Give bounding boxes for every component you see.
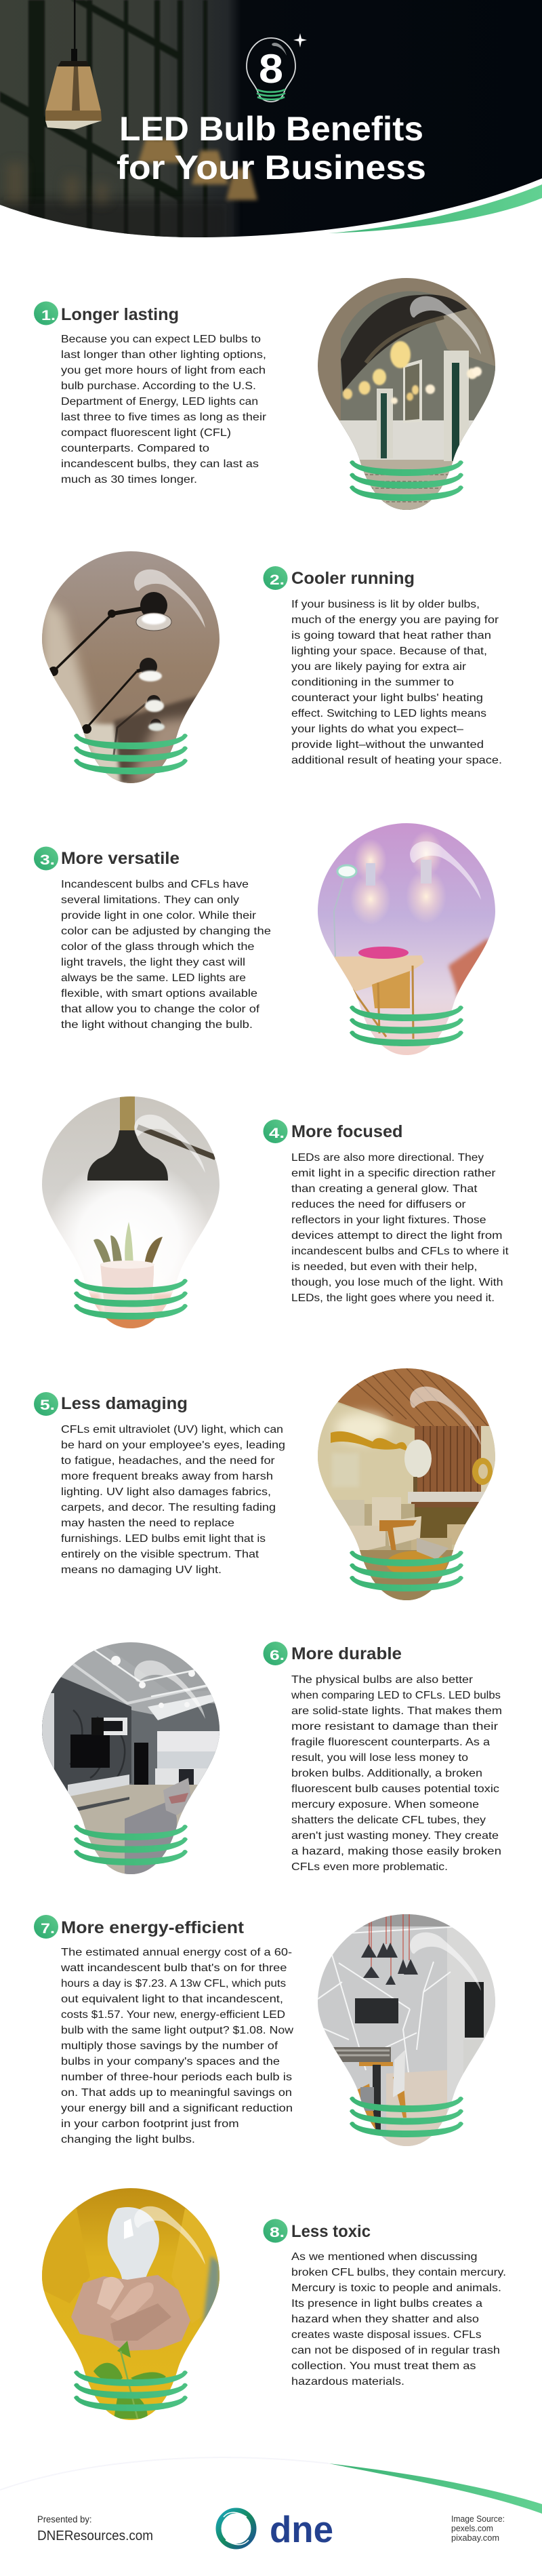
bulb highlight bbox=[410, 296, 481, 355]
body text: in your carbon footprint just from bbox=[61, 2118, 239, 2130]
body text: mercury exposure. When someone bbox=[291, 1799, 479, 1810]
bulb photo: massage room with purple light bbox=[318, 823, 495, 1055]
heading: Cooler running bbox=[291, 569, 415, 588]
header banner bbox=[0, 0, 542, 244]
body text: LEDs, the light goes where you need it. bbox=[291, 1292, 495, 1304]
heading: More energy-efficient bbox=[61, 1918, 245, 1937]
body text: is going toward that heat rather than bbox=[291, 630, 491, 641]
presented by: Presented by: bbox=[37, 2514, 92, 2524]
bulb photo: corridor with globe lights bbox=[318, 278, 495, 514]
body text: counteract your light bulbs' heating bbox=[291, 692, 483, 704]
title: for Your Business bbox=[117, 148, 426, 186]
number badge 8: 8. bbox=[270, 2225, 285, 2240]
body text bbox=[61, 334, 267, 486]
number badge 4 bbox=[263, 1119, 287, 1143]
number badge 1 bbox=[34, 301, 58, 325]
panel: 8 less toxic bbox=[42, 2188, 506, 2420]
title bbox=[117, 110, 426, 186]
presented by bbox=[37, 2514, 153, 2543]
body text: than creating a general glow. That bbox=[291, 1183, 478, 1195]
number badge 7 bbox=[34, 1915, 58, 1939]
image source: Image Source: bbox=[451, 2514, 505, 2524]
icon: numbered light bulb bbox=[247, 33, 307, 102]
body text: hazard when they shatter and also bbox=[291, 2314, 479, 2325]
body text: on. That adds up to meaningful savings on bbox=[61, 2087, 292, 2099]
body text: always be the same. LED lights are bbox=[61, 972, 246, 984]
body text: color of the glass through which the bbox=[61, 941, 255, 953]
body text: much as 30 times longer. bbox=[61, 474, 197, 486]
bulb highlight bbox=[410, 1933, 481, 1991]
body text: CFLs even more problematic. bbox=[291, 1861, 448, 1873]
body text: much of the energy you are paying for bbox=[291, 614, 499, 626]
body text: If your business is lit by older bulbs, bbox=[291, 599, 480, 610]
bulb photo: white room with pendant lights bbox=[318, 1914, 495, 2146]
heading: More focused bbox=[291, 1122, 402, 1141]
body text: though, you lose much of the light. With bbox=[291, 1277, 503, 1288]
body text: conditioning in the summer to bbox=[291, 677, 454, 688]
body text: The physical bulbs are also better bbox=[291, 1674, 474, 1686]
body text: shatters the delicate CFL tubes, they bbox=[291, 1815, 486, 1826]
body text: CFLs emit ultraviolet (UV) light, which can bbox=[61, 1424, 283, 1435]
body text: flexible, with smart options available bbox=[61, 988, 257, 999]
body text: changing the light bulbs. bbox=[61, 2134, 195, 2145]
bulb base rings bbox=[74, 1825, 188, 1865]
body text: that allow you to change the color of bbox=[61, 1004, 260, 1015]
body text: collection. You must treat them as bbox=[291, 2360, 476, 2372]
bulb highlight bbox=[134, 2206, 205, 2265]
green swoosh bbox=[329, 184, 542, 233]
body text: watt incandescent bulb that's on for three bbox=[60, 1962, 287, 1974]
body text: furnishings. LED bulbs emit light that is bbox=[61, 1533, 266, 1545]
bulb base rings bbox=[350, 1006, 463, 1046]
body text: out equivalent light to that incandescent, bbox=[61, 1994, 283, 2005]
body text: more frequent breaks away from harsh bbox=[61, 1471, 273, 1482]
body text: broken bulbs. Additionally, a broken bbox=[291, 1768, 482, 1779]
body text: several limitations. They can only bbox=[61, 894, 239, 906]
bulb base rings bbox=[350, 1551, 463, 1591]
logo: dne: dne bbox=[270, 2508, 333, 2550]
bulb photo: lounge with wood slats bbox=[318, 1368, 498, 1600]
number badge 2 bbox=[263, 566, 287, 590]
body text: fluorescent bulb causes potential toxic bbox=[291, 1783, 499, 1795]
bulb base rings bbox=[74, 1279, 188, 1320]
body text: effect. Switching to LED lights means bbox=[291, 708, 486, 719]
body text: reduces the need for diffusers or bbox=[291, 1199, 466, 1210]
body text bbox=[291, 1152, 509, 1304]
heading: More durable bbox=[291, 1644, 402, 1663]
body text: are solid-state lights. That makes them bbox=[291, 1705, 502, 1717]
body text bbox=[60, 1947, 293, 2145]
bulb photo: hand holding white bulb bbox=[42, 2188, 220, 2420]
bulb highlight bbox=[134, 1115, 205, 1173]
number badge 4: 4. bbox=[269, 1126, 285, 1141]
body text: a hazard, making those easily broken bbox=[291, 1846, 501, 1857]
body text: Mercury is toxic to people and animals. bbox=[291, 2282, 501, 2294]
body text: bulb with the same light output? $1.08. Now bbox=[61, 2025, 293, 2036]
panel: 3 more versatile bbox=[34, 823, 495, 1055]
bulb base rings bbox=[350, 2097, 463, 2137]
body text: is needed, but even with their help, bbox=[291, 1261, 477, 1273]
body text: carpets, and decor. The resulting fading bbox=[61, 1502, 276, 1513]
body text: Because you can expect LED bulbs to bbox=[61, 334, 261, 345]
body text: the light without changing the bulb. bbox=[61, 1019, 253, 1031]
body text: Department of Energy, LED lights can bbox=[61, 396, 258, 408]
heading: Less damaging bbox=[61, 1394, 188, 1413]
bulb base rings bbox=[74, 2371, 188, 2411]
body text: hours a day is $7.23. A 13w CFL, which puts bbox=[61, 1978, 286, 1989]
body text: compact fluorescent light (CFL) bbox=[61, 427, 231, 439]
body text bbox=[291, 599, 502, 766]
panel: 1 longer lasting bbox=[34, 278, 495, 514]
number badge 1: 1. bbox=[41, 308, 56, 323]
body text: costs $1.57. Your new, energy-efficient LED bbox=[61, 2009, 285, 2021]
body text: last longer than other lighting options, bbox=[61, 349, 266, 361]
body text: may hasten the need to replace bbox=[61, 1518, 234, 1529]
body text: broken CFL bulbs, they contain mercury. bbox=[291, 2267, 506, 2278]
body text bbox=[61, 879, 271, 1031]
body text: lighting. UV light also damages fabrics, bbox=[61, 1486, 271, 1498]
body text: number of three-hour periods each bulb is bbox=[61, 2072, 292, 2083]
body text: fragile fluorescent counterparts. As a bbox=[291, 1737, 490, 1748]
body text: Incandescent bulbs and CFLs have bbox=[61, 879, 249, 890]
body text: The estimated annual energy cost of a 60- bbox=[61, 1947, 292, 1958]
body text: last three to five times as long as their bbox=[61, 412, 267, 423]
presented by: DNEResources.com bbox=[37, 2529, 153, 2543]
body text: Its presence in light bulbs creates a bbox=[291, 2298, 482, 2310]
number badge 6: 6. bbox=[270, 1648, 285, 1663]
body text: bulbs in your company's spaces and the bbox=[61, 2056, 280, 2067]
body text: to fatigue, headaches, and the need for bbox=[61, 1455, 275, 1467]
body text: your energy bill and a significant reduction bbox=[61, 2103, 293, 2114]
bulb highlight bbox=[410, 841, 481, 900]
body text: you are likely paying for extra air bbox=[291, 661, 467, 673]
number badge 2: 2. bbox=[270, 572, 285, 588]
body text bbox=[61, 1424, 285, 1576]
bulb highlight bbox=[410, 1387, 481, 1445]
body text: lighting your space. Because of that, bbox=[291, 646, 487, 657]
image source bbox=[451, 2514, 505, 2543]
title: LED Bulb Benefits bbox=[119, 110, 423, 148]
bulb highlight bbox=[134, 1661, 205, 1719]
body text bbox=[291, 2251, 506, 2387]
body text: you get more hours of light from each bbox=[61, 365, 266, 376]
body text: be hard on your employee's eyes, leading bbox=[61, 1440, 285, 1451]
number badge 3: 3. bbox=[40, 852, 55, 868]
panel: 2 cooler running bbox=[42, 551, 502, 783]
body text: entirely on the visible spectrum. That bbox=[61, 1549, 259, 1560]
image source: pexels.com bbox=[451, 2524, 493, 2533]
body text: reflectors in your light fixtures. Those bbox=[291, 1214, 486, 1226]
panel: 7 more energy-efficient bbox=[34, 1914, 495, 2146]
body text: As we mentioned when discussing bbox=[291, 2251, 477, 2263]
bulb highlight bbox=[134, 570, 205, 628]
body text: hazardous materials. bbox=[291, 2376, 404, 2387]
body text: more resistant to damage than their bbox=[291, 1721, 499, 1732]
number badge 5: 5. bbox=[40, 1398, 55, 1413]
icon: numbered light bulb: 8 bbox=[259, 46, 283, 92]
footer bbox=[0, 2457, 542, 2550]
header photo: pendant lamps in dark room bbox=[0, 0, 542, 244]
bulb base rings bbox=[350, 460, 463, 501]
body text: LEDs are also more directional. They bbox=[291, 1152, 484, 1164]
heading: Longer lasting bbox=[61, 305, 179, 324]
logo: dne bbox=[218, 2508, 333, 2550]
body text: color can be adjusted by changing the bbox=[61, 926, 271, 937]
number badge 6 bbox=[263, 1642, 287, 1665]
body text: incandescent bulbs and CFLs to where it bbox=[291, 1246, 509, 1257]
body text: incandescent bulbs, they can last as bbox=[61, 458, 259, 470]
number badge 7: 7. bbox=[41, 1921, 55, 1937]
body text: provide light in one color. While their bbox=[61, 910, 257, 922]
panel: 4 more focused bbox=[42, 1096, 509, 1328]
body text: when comparing LED to CFLs. LED bulbs bbox=[291, 1690, 501, 1701]
body text: can not be disposed of in regular trash bbox=[291, 2345, 500, 2356]
body text: bulb purchase. According to the U.S. bbox=[61, 380, 256, 392]
icon: sparkle bbox=[293, 33, 307, 47]
heading: Less toxic bbox=[291, 2222, 371, 2241]
body text: result, you will lose less money to bbox=[291, 1752, 468, 1764]
body text: multiply those savings by the number of bbox=[61, 2040, 278, 2052]
heading: More versatile bbox=[61, 849, 180, 868]
bulb photo: grey living room and kitchen bbox=[42, 1642, 220, 1874]
body text: counterparts. Compared to bbox=[61, 443, 209, 454]
body text: creates waste disposal issues. CFLs bbox=[291, 2329, 481, 2341]
panel: 6 more durable bbox=[42, 1642, 502, 1874]
footer green swoosh bbox=[329, 2463, 542, 2514]
body text: provide light–without the unwanted bbox=[291, 739, 484, 751]
body text: emit light in a specific direction rather bbox=[291, 1168, 496, 1179]
body text: aren't just wasting money. They create bbox=[291, 1830, 499, 1842]
panel: 5 less damaging bbox=[34, 1368, 498, 1600]
body text bbox=[291, 1674, 502, 1873]
body text: additional result of heating your space. bbox=[291, 755, 502, 766]
number badge 3 bbox=[34, 846, 58, 871]
body text: light travels, the light they cast will bbox=[61, 957, 245, 968]
number badge 8 bbox=[263, 2219, 287, 2243]
number badge 5 bbox=[34, 1392, 58, 1416]
image source: pixabay.com bbox=[451, 2533, 499, 2543]
bulb photo: wall lamps bbox=[42, 551, 220, 783]
bulb photo: lamp over potted plant bbox=[42, 1096, 220, 1328]
body text: devices attempt to direct the light from bbox=[291, 1230, 503, 1242]
body text: means no damaging UV light. bbox=[61, 1564, 222, 1576]
body text: your lights do what you expect– bbox=[291, 724, 463, 735]
bulb base rings bbox=[74, 734, 188, 774]
